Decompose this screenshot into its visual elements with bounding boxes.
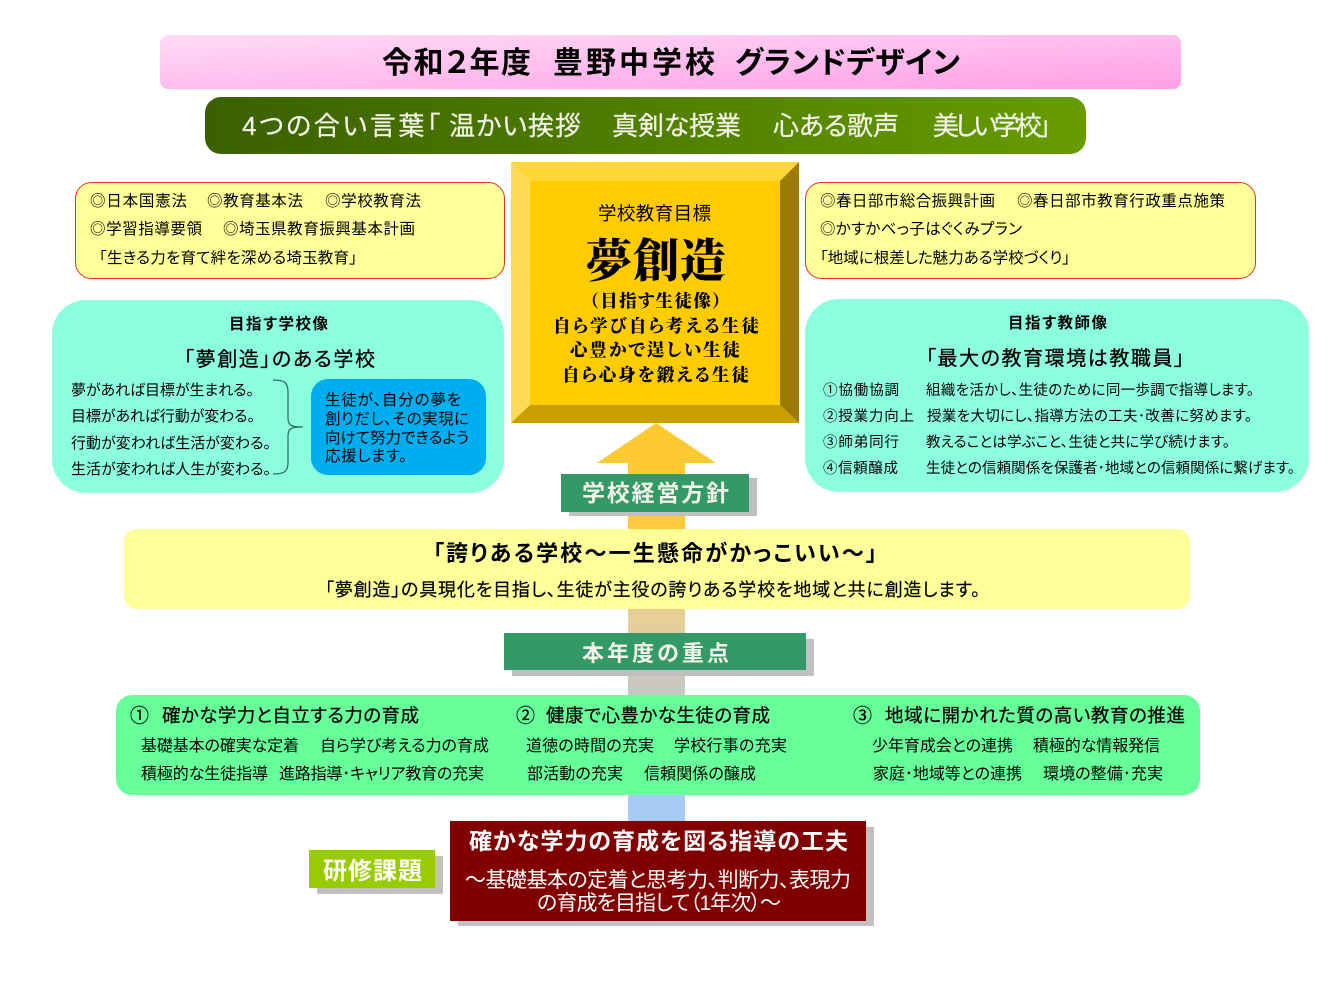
callout: support message (311, 379, 486, 475)
panel: ideal teacher (805, 299, 1309, 492)
title banner (160, 35, 1181, 89)
title banner: グランドデザイン (735, 46, 960, 80)
panel: priorities: 自ら学び考える力の育成 (320, 737, 489, 755)
panel: priorities (116, 695, 1200, 795)
panel: priorities: ② (516, 705, 535, 727)
panel: training theme detail: の育成を目指して（1年次）～ (537, 892, 781, 915)
panel: school education goal: 夢創造 (586, 236, 726, 287)
title banner: 豊野中学校 (553, 47, 715, 80)
panel: ideal teacher: ③師弟同行 (823, 434, 899, 451)
panel: national and prefectural policies: ◎日本国憲法 (90, 192, 187, 210)
slogan banner: 温かい挨拶 (449, 111, 581, 141)
panel: priorities: 環境の整備･充実 (1043, 765, 1163, 783)
panel: priorities: 進路指導･キャリア教育の充実 (279, 764, 484, 783)
panel: ideal teacher: 組織を活かし、生徒のために同一歩調で指導します。 (926, 382, 1254, 399)
panel: ideal school: 行動が変われば生活が変わる。 (71, 435, 271, 452)
panel: national and prefectural policies (76, 182, 504, 278)
panel: priorities: ③ (853, 705, 872, 727)
panel: ideal teacher: 目指す教師像 (1008, 313, 1107, 332)
arrow: upward flow (597, 423, 716, 822)
panel: priorities: 積極的な生徒指導 (141, 764, 268, 783)
title banner: 令和２年度 (382, 47, 531, 80)
callout: support message: 生徒が、自分の夢を (325, 391, 461, 409)
callout: support message: 応援します。 (325, 447, 407, 465)
panel: city policies (806, 182, 1256, 278)
panel: training theme detail: ～基礎基本の定着と思考力、判断力、表現力 (465, 869, 851, 892)
panel: ideal school (52, 300, 504, 493)
panel: priorities: 基礎基本の確実な定着 (141, 737, 299, 755)
panel: priorities: 部活動の充実 (527, 765, 623, 783)
callout: support message: 向けて努力できるよう (325, 429, 469, 447)
panel: ideal teacher: ①協働協調 (823, 382, 899, 399)
label: school management policy: 学校経営方針 (582, 480, 729, 506)
label: school management policy (561, 474, 757, 516)
slogan banner: 真剣な授業 (612, 111, 741, 141)
panel: ideal school: 目標があれば行動が変わる。 (71, 408, 255, 425)
slogan banner: 4つの合い言葉「 (242, 111, 440, 141)
panel: priorities: 信頼関係の醸成 (644, 765, 756, 783)
label: training theme: 研修課題 (323, 858, 422, 885)
panel: city policies: ◎かすかべっ子はぐくみプラン (820, 220, 1022, 238)
panel: national and prefectural policies: 「生きる力を育て絆を深める埼玉教育」 (99, 249, 357, 267)
panel: training theme detail (450, 821, 874, 926)
panel: national and prefectural policies: ◎学習指導要領 (90, 220, 202, 238)
panel: priorities: ① (130, 705, 149, 727)
label: this year's priorities: 本年度の重点 (582, 641, 729, 666)
panel: management policy statement (124, 529, 1190, 609)
slogan banner (205, 97, 1086, 154)
panel: school education goal: 学校教育目標 (598, 203, 711, 224)
panel: school education goal: 心豊かで逞しい生徒 (570, 340, 740, 360)
panel: management policy statement: 「誇りある学校～一生懸命がかっこいい～」 (433, 541, 877, 566)
panel: city policies: 「地域に根差した魅力ある学校づくり」 (820, 249, 1070, 267)
panel: ideal school: 夢があれば目標が生まれる。 (71, 382, 254, 399)
panel: priorities: 確かな学力と自立する力の育成 (162, 705, 419, 726)
panel: city policies: ◎春日部市教育行政重点施策 (1017, 192, 1225, 210)
label: training theme (309, 850, 443, 894)
panel: school education goal: 自ら心身を鍛える生徒 (562, 365, 750, 385)
panel: ideal school: 生活が変われば人生が変わる。 (71, 461, 271, 478)
panel: city policies: ◎春日部市総合振興計画 (820, 192, 995, 210)
panel: national and prefectural policies: ◎埼玉県教育振興基本計画 (223, 220, 415, 238)
callout: support message: 創りだし、その実現に (325, 410, 469, 428)
panel: ideal teacher: 教えることは学ぶこと、生徒と共に学び続けます。 (926, 434, 1230, 451)
panel: ideal teacher: ②授業力向上 (823, 408, 914, 425)
panel: ideal teacher: ④信頼醸成 (823, 460, 898, 477)
panel: priorities: 家庭･地域等との連携 (873, 765, 1022, 783)
panel: national and prefectural policies: ◎学校教育法 (325, 192, 421, 210)
icon: right brace (273, 380, 303, 474)
panel: ideal teacher: 授業を大切にし、指導方法の工夫･改善に努めます。 (927, 408, 1252, 425)
panel: ideal teacher: 「最大の教育環境は教職員」 (926, 347, 1184, 370)
label: this year's priorities (504, 633, 814, 676)
panel: ideal school: 「夢創造」のある学校 (184, 348, 375, 371)
panel: school education goal (511, 162, 799, 423)
slogan banner: 美しい学校」 (933, 111, 1051, 141)
panel: priorities: 学校行事の充実 (674, 737, 787, 755)
panel: training theme detail: 確かな学力の育成を図る指導の工夫 (469, 828, 848, 854)
panel: priorities: 道徳の時間の充実 (526, 737, 654, 755)
panel: ideal teacher: 生徒との信頼関係を保護者･地域との信頼関係に繋げます。 (926, 460, 1295, 477)
panel: school education goal: 自ら学び自ら考える生徒 (553, 316, 760, 336)
panel: priorities: 地域に開かれた質の高い教育の推進 (885, 705, 1185, 726)
panel: school education goal: （目指す生徒像） (590, 291, 721, 311)
panel: ideal school: 目指す学校像 (229, 314, 328, 333)
panel: priorities: 積極的な情報発信 (1033, 737, 1160, 755)
panel: national and prefectural policies: ◎教育基本法 (207, 192, 303, 210)
panel: priorities: 健康で心豊かな生徒の育成 (546, 705, 770, 726)
slogan banner: 心ある歌声 (773, 111, 899, 141)
panel: priorities: 少年育成会との連携 (872, 737, 1013, 755)
panel: management policy statement: 「夢創造」の具現化を目指し、生徒が主役の誇りある学校を地域と共に創造します。 (325, 580, 980, 600)
